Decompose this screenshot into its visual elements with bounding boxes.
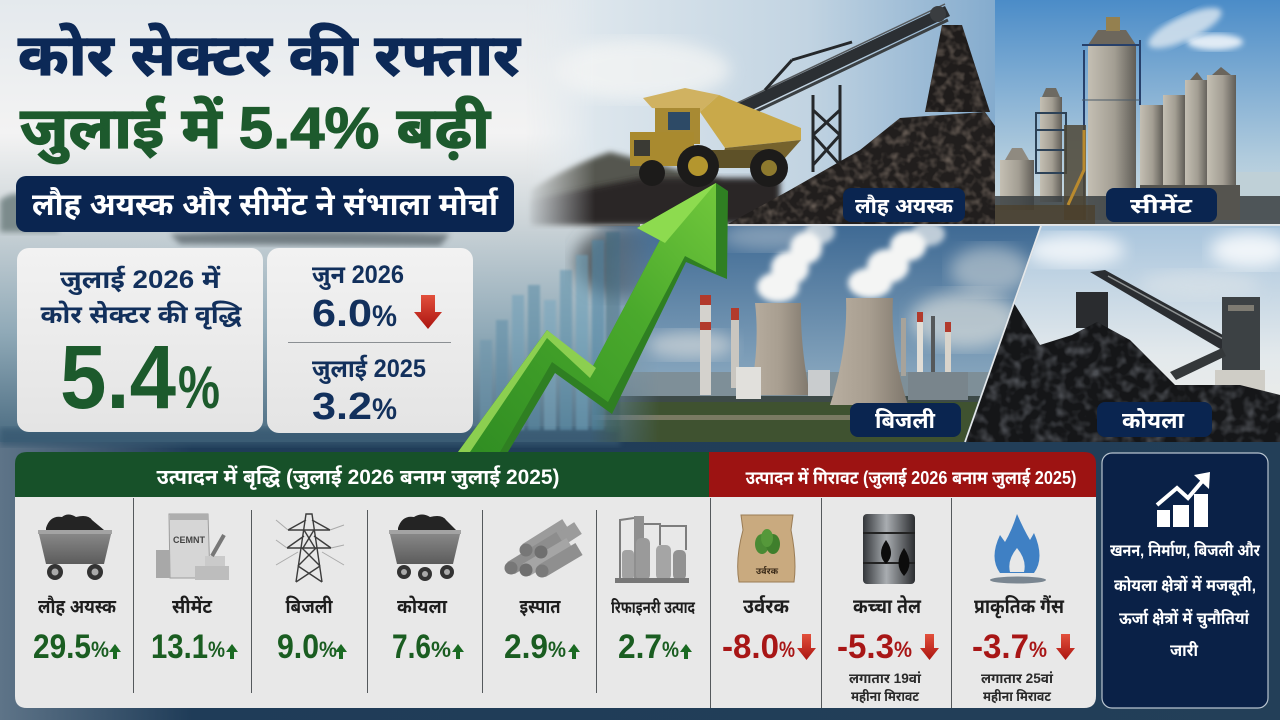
coal conveyor and tower — [1076, 270, 1265, 395]
item: natural gas: % — [1029, 637, 1047, 662]
item: fertilizer: -8.0 — [722, 628, 779, 666]
item: steel: 2.9 — [504, 628, 548, 666]
title line 2: जुलाई में 5.4% बढ़ी — [20, 96, 491, 164]
item: coal: 7.6 — [392, 628, 431, 666]
decline header: उत्पादन में गिरावट (जुलाई 2026 बनाम जुलाई 2025) — [746, 467, 1076, 489]
item: crude oil — [837, 514, 939, 704]
item: cement — [151, 514, 238, 666]
June 2026: जुन 2026 — [312, 261, 404, 290]
item: crude oil: महीना मिरावट — [851, 688, 920, 704]
subtitle banner — [16, 176, 514, 232]
photo label: coal: कोयला — [1122, 408, 1185, 433]
green growth arrow — [458, 183, 728, 452]
photo label: electricity — [850, 403, 961, 437]
icon: coal cart — [389, 514, 461, 581]
subtitle banner: लौह अयस्क और सीमेंट ने संभाला मोर्चा — [32, 187, 499, 222]
card: July 2026 core sector growth: % — [178, 354, 220, 421]
photo label: cement — [1106, 188, 1217, 222]
divider lines between photos — [640, 225, 1280, 442]
item: refinery products: 2.7 — [618, 628, 662, 666]
item: refinery products: % — [662, 637, 679, 662]
cooling towers — [736, 298, 968, 405]
item: cement: सीमेंट — [172, 595, 213, 618]
photo label: iron ore — [843, 188, 965, 222]
icon: rising bar chart — [1157, 472, 1210, 527]
item: coal — [389, 514, 464, 666]
title — [18, 23, 521, 164]
item: coal: कोयला — [397, 596, 447, 618]
photo label: coal — [1097, 402, 1212, 437]
icon: fertilizer sack — [738, 515, 795, 582]
card: July 2026 core sector growth: कोर सेक्टर की वृद्धि — [40, 300, 242, 330]
conveyor belt — [728, 4, 950, 172]
item: crude oil: % — [894, 637, 912, 662]
takeaway text: जारी — [1170, 640, 1199, 660]
icon: steel pipes — [504, 525, 579, 578]
photo label: iron ore: लौह अयस्क — [855, 194, 954, 218]
photo: power plant with cooling towers — [560, 220, 1040, 442]
card: comparison figures: % — [372, 300, 397, 333]
card: comparison figures: 6.0 — [312, 293, 372, 335]
item: fertilizer — [722, 515, 816, 666]
photo: cement plant — [995, 0, 1280, 225]
icon: ore cart — [38, 514, 112, 580]
chimneys — [700, 295, 951, 395]
item: steel — [504, 525, 580, 666]
photo: coal yard — [960, 226, 1280, 442]
big number: 5.4 — [60, 328, 176, 428]
panel: production growth — [15, 452, 709, 708]
note: 25th month: लगातार 25वां — [981, 670, 1054, 686]
panel: production decline — [709, 452, 1096, 708]
item: natural gas: प्राकृतिक गैंस — [974, 594, 1065, 619]
icon: oil barrel — [863, 514, 915, 584]
item: natural gas — [972, 514, 1075, 704]
item: cement: % — [208, 637, 225, 662]
item: iron ore: लौह अयस्क — [38, 596, 117, 618]
icon: gas flame — [990, 514, 1046, 584]
growth header: उत्पादन में बृद्धि (जुलाई 2026 बनाम जुलाई 2025) — [156, 465, 560, 490]
takeaway text — [1110, 540, 1260, 660]
item: fertilizer: % — [779, 637, 795, 662]
dump truck — [630, 88, 801, 187]
item: electricity: बिजली — [286, 596, 333, 618]
faded chart backdrop — [480, 232, 620, 432]
item: refinery products — [611, 516, 695, 666]
title line 1: कोर सेक्टर की रफ्तार — [18, 23, 521, 88]
card: July 2026 core sector growth — [17, 248, 263, 432]
card: comparison figures — [267, 248, 473, 433]
item: natural gas: -3.7 — [972, 628, 1029, 666]
takeaway text: ऊर्जा क्षेत्रों में चुनौतियां — [1119, 608, 1250, 629]
smoke plumes — [757, 220, 945, 302]
card: comparison figures: % — [372, 393, 397, 426]
icon: fertilizer sack: उर्वरक — [756, 565, 779, 576]
July 2025: जुलाई 2025 — [312, 354, 426, 384]
icon: cement bag — [156, 514, 229, 580]
falling ore and ore pile — [728, 25, 1005, 224]
item: crude oil: -5.3 — [837, 628, 894, 666]
item: coal: % — [431, 637, 451, 662]
item: steel: इस्पात — [520, 597, 562, 618]
icon: red down arrow — [414, 295, 442, 329]
item: crude oil: कच्चा तेल — [853, 594, 922, 618]
item: natural gas: महीना मिरावट — [983, 688, 1052, 704]
takeaway text: कोयला क्षेत्रों में मजबूती, — [1114, 575, 1256, 597]
item: electricity: 9.0 — [277, 628, 319, 666]
card label: जुलाई 2026 में — [60, 265, 221, 295]
item: fertilizer: उर्वरक — [743, 595, 789, 618]
item: refinery products: रिफाइनरी उत्पाद — [611, 597, 695, 617]
item: cement: 13.1 — [151, 628, 208, 666]
icon: transmission tower — [276, 514, 344, 582]
item: electricity: % — [319, 637, 337, 662]
note: 19th month: लगातार 19वां — [849, 670, 922, 686]
item: iron ore: % — [91, 637, 109, 662]
item: iron ore — [33, 514, 121, 666]
icon: refinery — [615, 516, 689, 583]
panel: key takeaway — [1102, 453, 1268, 708]
card: comparison figures: 3.2 — [312, 386, 372, 428]
photo label: cement: सीमेंट — [1130, 194, 1193, 218]
item: steel: % — [548, 637, 566, 662]
icon: cement bag: CEMNT — [173, 535, 205, 545]
item: electricity — [276, 514, 347, 666]
photo: iron ore mine with dump truck — [500, 0, 1010, 225]
photo label: electricity: बिजली — [875, 408, 936, 433]
item: iron ore: 29.5 — [33, 628, 91, 666]
